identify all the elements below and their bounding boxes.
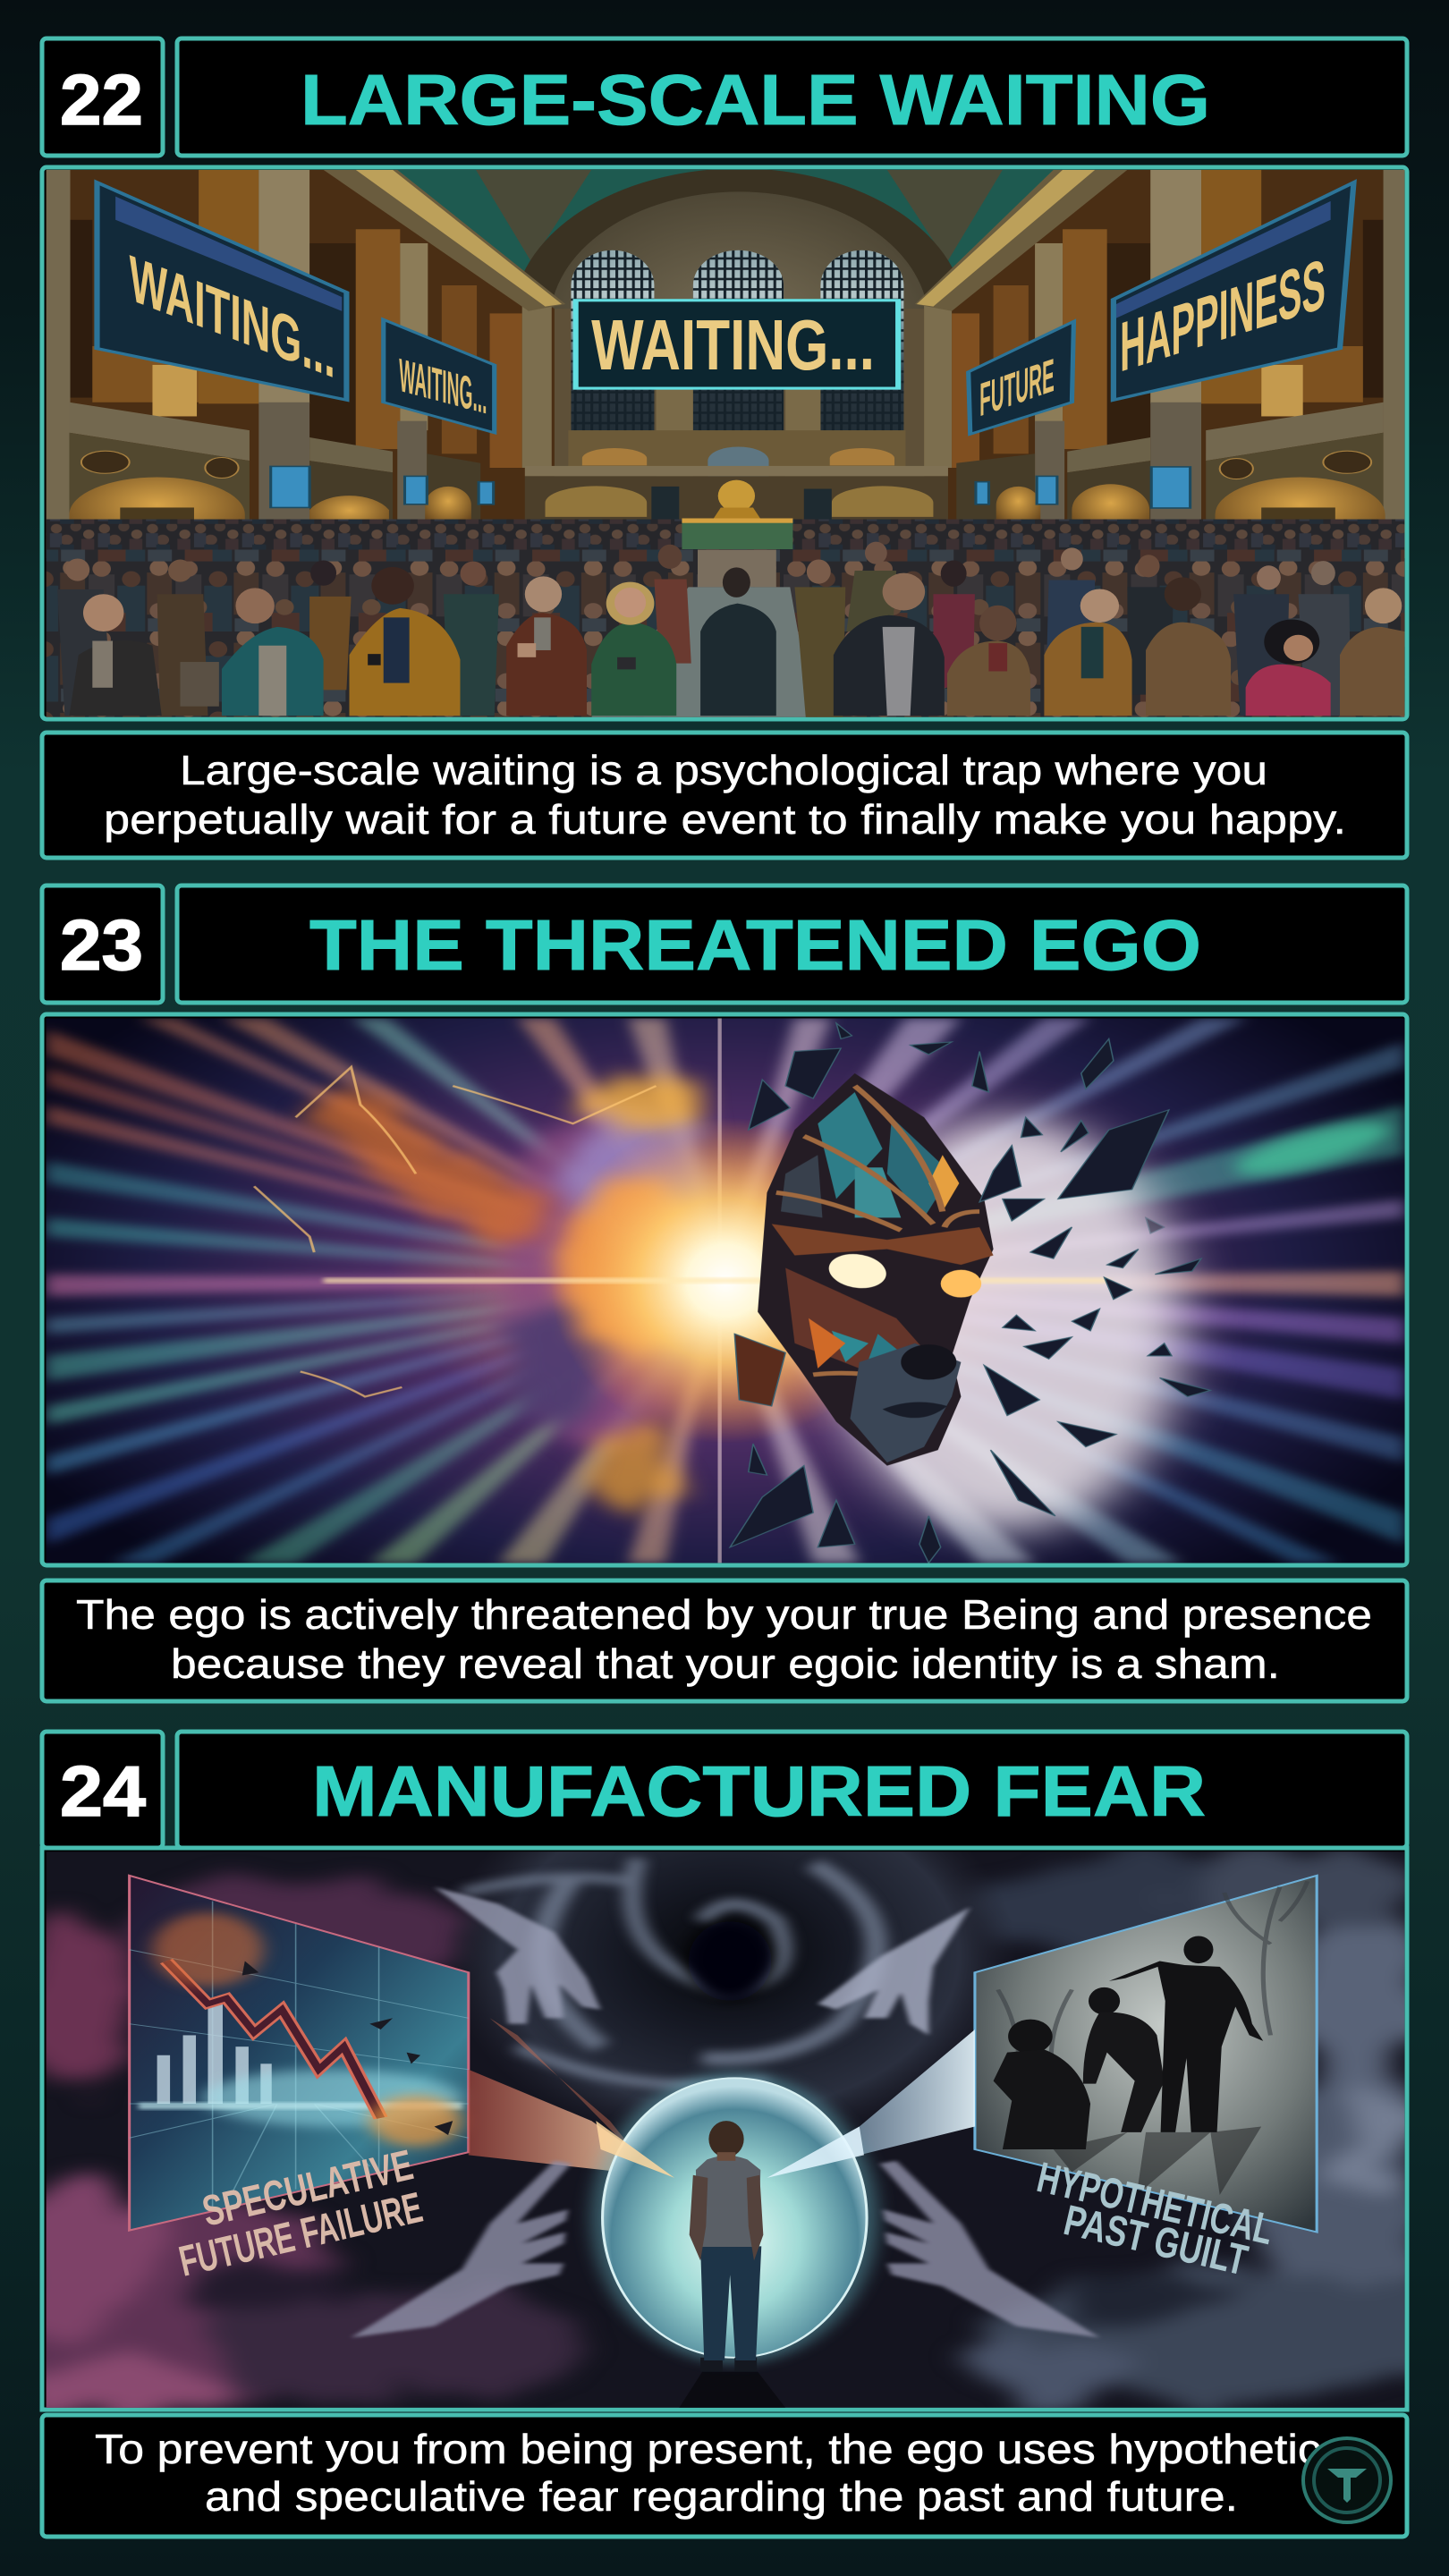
swirling vortex	[444, 1761, 1016, 2149]
smoke clouds	[0, 1847, 1449, 2411]
label: hypothetical past guilt: PAST GUILT	[1060, 2196, 1252, 2284]
logo badge	[1303, 2438, 1391, 2522]
section 23: the threatened ego	[42, 886, 1407, 1701]
number badge 24: 24	[60, 1751, 147, 1831]
lower arches	[70, 478, 1385, 519]
mid crowd figures	[57, 542, 1351, 718]
right wall	[915, 170, 1406, 558]
person seen from behind	[690, 2121, 763, 2372]
happiness sign: HAPPINESS	[1120, 244, 1326, 387]
left screen: speculative future failure	[130, 1876, 469, 2231]
number badge 22	[42, 38, 163, 156]
happiness sign	[1114, 182, 1353, 400]
white halo behind mask	[832, 1117, 1182, 1531]
panel: shattering ego mask illustration	[42, 1014, 1407, 1565]
left wall	[47, 170, 565, 558]
heading: large-scale waiting: LARGE-SCALE WAITING	[301, 60, 1210, 140]
arched windows	[571, 250, 903, 430]
vertical split line	[718, 1018, 722, 1563]
light rays	[47, 1018, 1404, 1563]
central vault	[397, 168, 1081, 477]
panel: train station crowd illustration	[42, 167, 1407, 719]
blue info panels	[271, 466, 1191, 508]
shattered mask	[758, 1073, 994, 1466]
flying shards	[730, 1023, 1210, 1563]
right screen: hypothetical past guilt	[975, 1876, 1317, 2232]
caption 24	[42, 2415, 1407, 2537]
label: speculative future failure: SPECULATIVE	[198, 2140, 418, 2235]
heading: large-scale waiting	[177, 38, 1407, 156]
background crowd	[47, 520, 1404, 717]
future sign: FUTURE	[979, 350, 1055, 427]
label: hypothetical past guilt: HYPOTHETICAL	[1033, 2153, 1278, 2254]
flame wisps	[254, 1067, 657, 1396]
foreground people checking phones	[69, 567, 1404, 716]
hand: lower right	[880, 2161, 1099, 2337]
caption 22: Large-scale waiting is a psychological trap where you	[180, 747, 1267, 793]
section 24: manufactured fear	[0, 1732, 1449, 2537]
hanging plaques	[81, 451, 1371, 479]
future sign	[969, 321, 1073, 434]
green aurora	[1226, 1113, 1398, 1185]
section 22: large-scale waiting	[42, 38, 1407, 858]
heading: the threatened ego: THE THREATENED EGO	[309, 905, 1201, 985]
number badge 22: 22	[60, 60, 143, 140]
heading: manufactured fear: MANUFACTURED FEAR	[312, 1751, 1206, 1831]
kiosk and floor	[591, 518, 813, 717]
left big sign: WAITING...	[130, 242, 335, 393]
hand: upper right	[818, 1907, 970, 2035]
caption 24: and speculative fear regarding the past and future.	[205, 2473, 1238, 2520]
beam tips inside bubble	[596, 2121, 864, 2178]
central starburst	[550, 1117, 901, 1444]
light beams toward bubble	[469, 2018, 975, 2178]
caption 23: because they reveal that your egoic identity is a sham.	[171, 1640, 1280, 1687]
central balcony and columns	[525, 388, 948, 520]
caption 22	[42, 733, 1407, 858]
hand: upper left	[435, 1887, 601, 2024]
number badge 24	[42, 1732, 163, 1848]
caption 22: perpetually wait for a future event to finally make you happy.	[104, 796, 1346, 843]
protective bubble	[591, 2072, 877, 2363]
left small sign: WAITING...	[399, 349, 487, 425]
caption 23: The ego is actively threatened by your true Being and presence	[76, 1591, 1372, 1638]
label: speculative future failure: FUTURE FAILURE	[174, 2182, 427, 2285]
left small sign	[384, 319, 495, 433]
panel: bubble of presence surrounded by fear	[0, 1761, 1449, 2411]
heading: manufactured fear	[177, 1732, 1407, 1848]
heading: the threatened ego	[177, 886, 1407, 1003]
caption 23	[42, 1580, 1407, 1701]
central kiosk	[651, 480, 832, 524]
center sign: WAITING...	[591, 306, 875, 386]
left nebula	[296, 1077, 711, 1513]
hand: lower left	[352, 2161, 571, 2337]
ground shadow	[679, 2372, 785, 2408]
left big sign	[97, 182, 346, 400]
number badge 23: 23	[60, 905, 143, 985]
number badge 23	[42, 886, 163, 1003]
caption 24: To prevent you from being present, the ego uses hypothetic	[95, 2426, 1321, 2472]
